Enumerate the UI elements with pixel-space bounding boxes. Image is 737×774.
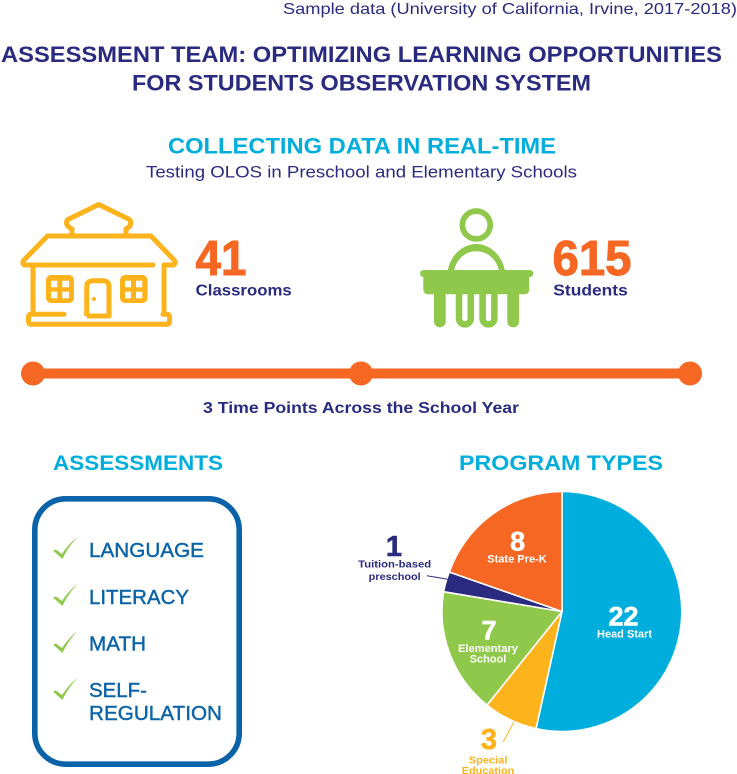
source note: Sample data (University of California, Irvine, 2017-2018) (283, 1, 737, 18)
pie label: elementary school: School (470, 654, 506, 666)
pie label: elementary school: 7 (481, 615, 497, 645)
title: ASSESSMENT TEAM: OPTIMIZING LEARNING OPPORTUNITIES (1, 42, 722, 67)
assessment labels: LITERACY (89, 587, 189, 609)
assessment labels (89, 540, 222, 725)
assessment labels: MATH (89, 634, 146, 656)
pie label: head start: 22 (608, 602, 639, 632)
pie label: state pre-k (487, 527, 547, 566)
pie label: special education: 3 (481, 724, 497, 756)
section subheading: Testing OLOS in Preschool and Elementary Schools (146, 163, 577, 182)
pie label: elementary school: Elementary (458, 643, 519, 655)
pie label: special education: Special (469, 755, 508, 766)
pie label: state pre-k: 8 (510, 527, 525, 557)
stat: classrooms: Classrooms (196, 283, 292, 300)
stat: classrooms (196, 232, 292, 300)
stat: students: 615 (552, 232, 632, 286)
pie label: tuition-based preschool (358, 531, 448, 583)
title: FOR STUDENTS OBSERVATION SYSTEM (132, 71, 591, 96)
title (1, 42, 722, 96)
heading: program types: PROGRAM TYPES (459, 452, 663, 475)
assessment labels: REGULATION (89, 703, 222, 725)
panel: assessments list (35, 499, 239, 764)
heading: assessments: ASSESSMENTS (53, 452, 223, 475)
pie label: tuition-based preschool: 1 (386, 531, 402, 563)
section heading: collecting data: COLLECTING DATA IN REAL-TIME (168, 134, 556, 158)
stat: classrooms: 41 (196, 232, 246, 286)
pie label: elementary school (458, 615, 519, 666)
assessment labels: LANGUAGE (89, 540, 204, 562)
icon: check marks (53, 537, 78, 700)
pie label: state pre-k: State Pre-K (487, 554, 547, 566)
assessment labels: SELF- (89, 680, 147, 702)
timeline with three points (21, 362, 702, 386)
stat: students: Students (553, 283, 628, 300)
pie label: head start (597, 602, 652, 641)
pie label: special education (462, 722, 514, 774)
icon: school building (23, 204, 175, 324)
pie label: tuition-based preschool: preschool (369, 572, 421, 583)
icon: student at desk (420, 211, 533, 327)
pie label: tuition-based preschool: Tuition-based (358, 560, 431, 571)
timeline caption: 3 Time Points Across the School Year (203, 400, 519, 417)
pie label: head start: Head Start (597, 629, 652, 641)
pie chart: program types (442, 492, 682, 731)
